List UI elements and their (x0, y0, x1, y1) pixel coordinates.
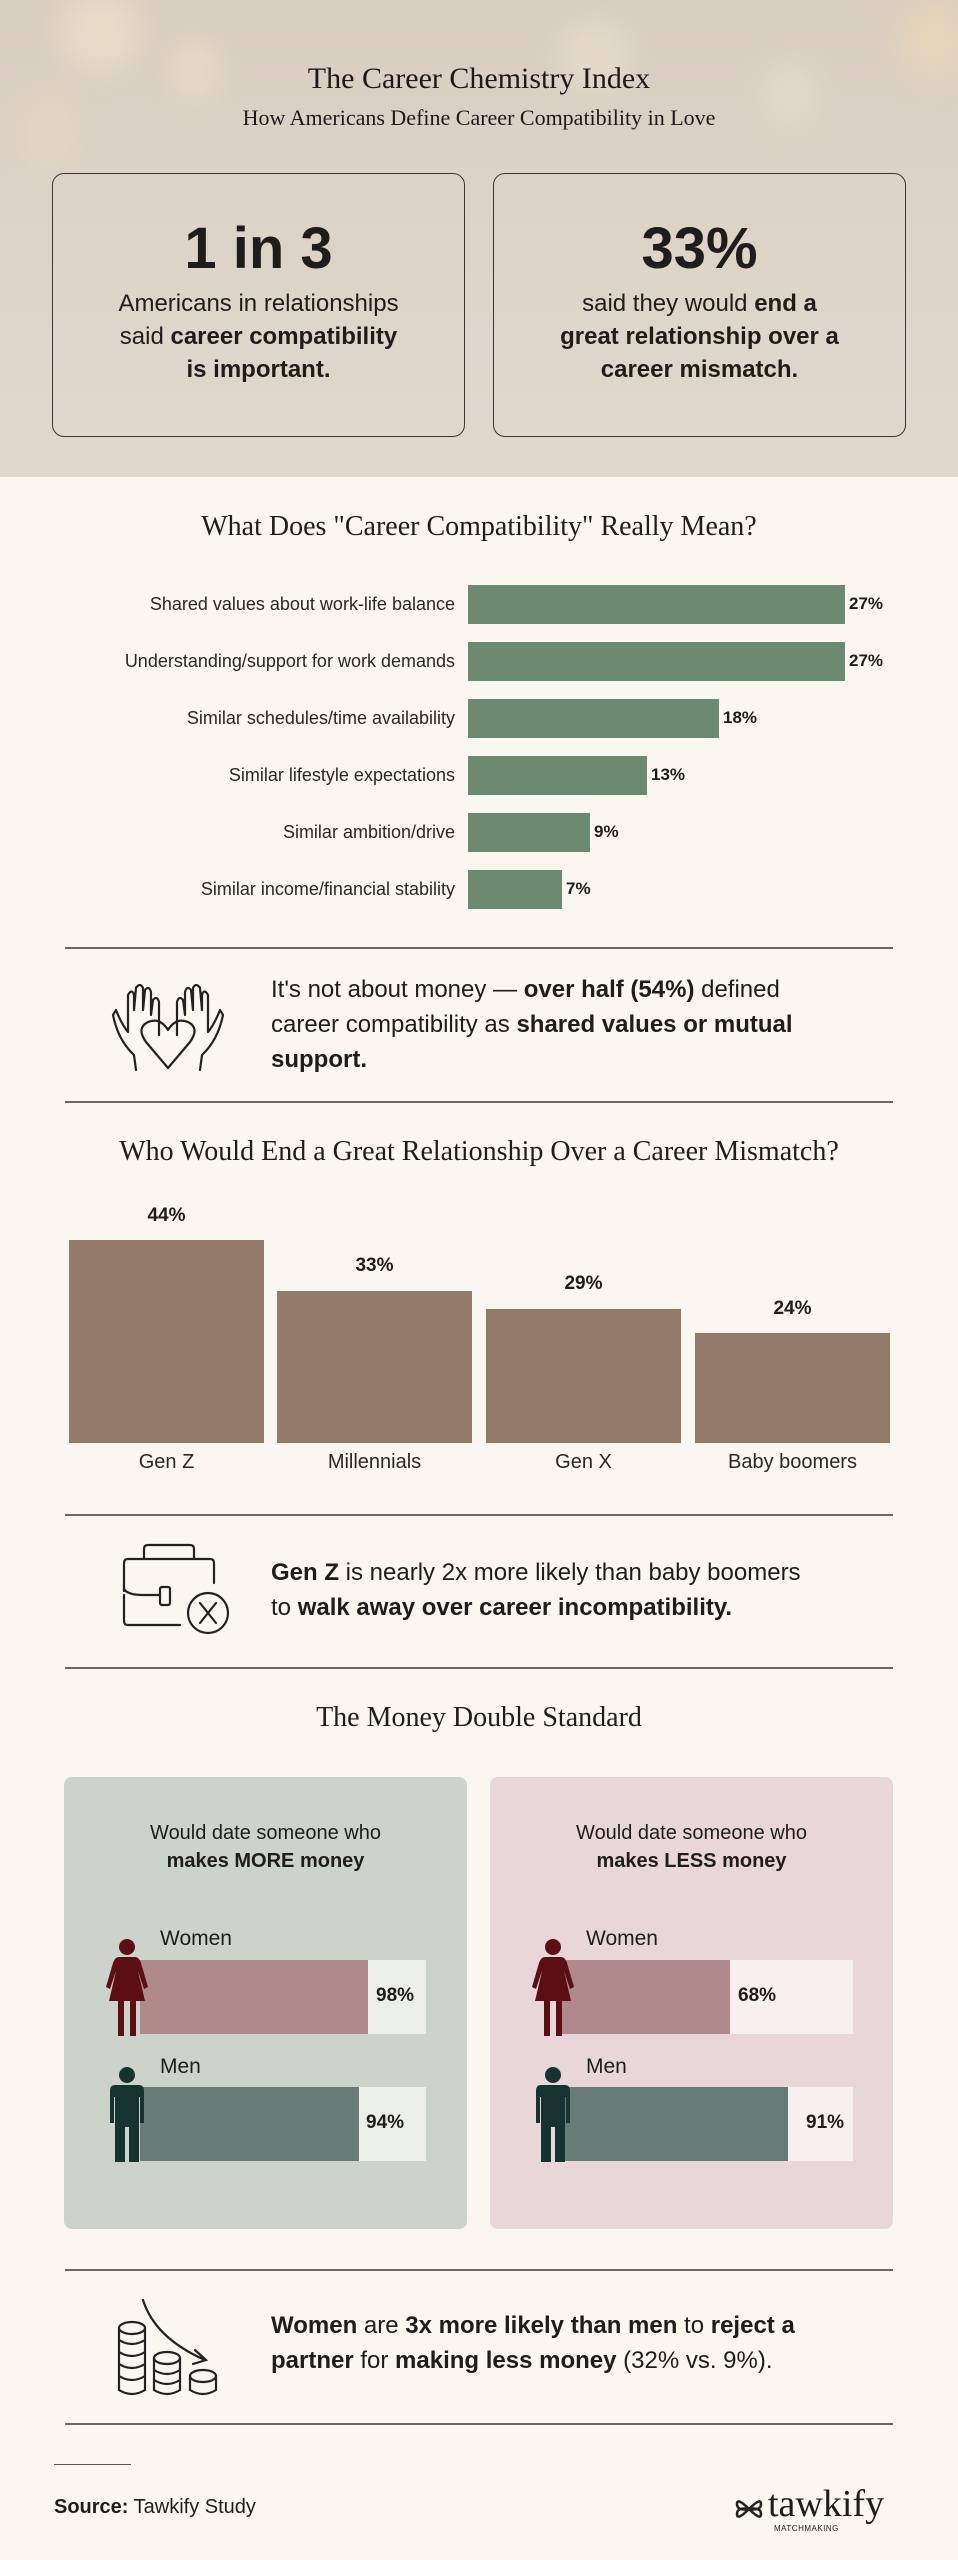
panel heading: Would date someone who (150, 1822, 381, 1844)
header background (0, 0, 958, 477)
vertical bar chart: 29% (564, 1273, 603, 1294)
horizontal bar chart: 9% (594, 822, 619, 841)
men bar 91%: 91% (806, 2112, 844, 2133)
horizontal bar chart: 27% (849, 651, 883, 670)
callout: not about money: support. (271, 1046, 367, 1073)
callout: Gen Z: to walk away over career incompatibility. (271, 1594, 732, 1621)
men bar 94%: 94% (366, 2112, 404, 2133)
stat card: 33%: 33% (641, 216, 758, 281)
horizontal bar chart: 18% (723, 708, 757, 727)
vertical bar chart: 24% (773, 1298, 812, 1319)
vertical bar chart: Baby boomers (728, 1451, 857, 1473)
horizontal bar chart: Similar income/financial stability (201, 879, 455, 899)
panel heading (576, 1822, 807, 1872)
panel: makes less money (490, 1777, 893, 2229)
stat card: 33%: said they would end a (582, 290, 817, 317)
vertical bar chart: Millennials (328, 1451, 421, 1473)
callout: Gen Z (271, 1559, 801, 1621)
horizontal bar chart: 13% (651, 765, 685, 784)
icon: woman (106, 1939, 148, 2036)
icon: briefcase with x (122, 1544, 230, 1634)
panel: makes more money: Men (160, 2055, 201, 2078)
logo: tawkify (736, 2483, 884, 2533)
panel heading: makes MORE money (167, 1850, 364, 1872)
panel: makes less money: Men (586, 2055, 627, 2078)
women bar 98%: 98% (376, 1985, 414, 2006)
vertical bar chart: Gen X (555, 1451, 612, 1473)
icon: woman (532, 1939, 574, 2036)
callout: not about money (271, 976, 793, 1073)
horizontal bar chart: 27% (849, 594, 883, 613)
callout: not about money: career compatibility as shared values or mutual (271, 1011, 793, 1038)
stat card: 1 in 3: Americans in relationships (118, 290, 399, 317)
horizontal bar chart: Shared values about work-life balance (150, 594, 455, 614)
panel: makes more money (64, 1777, 467, 2229)
panel heading: Would date someone who (576, 1822, 807, 1844)
stat card: 1 in 3: 1 in 3 (184, 216, 333, 281)
heading: career compatibility: What Does "Career Compatibility" Really Mean? (201, 511, 757, 542)
callout: women 3x (271, 2312, 795, 2374)
heading: who would end: Who Would End a Great Relationship Over a Career Mismatch? (119, 1136, 839, 1167)
stat card: 33%: great relationship over a (560, 323, 839, 350)
panel: makes less money: Women (586, 1927, 658, 1950)
logo: tawkify: tawkify (768, 2483, 884, 2525)
icon: hands with heart (112, 984, 224, 1072)
vertical bar chart (69, 1205, 890, 1473)
callout: women 3x: partner for making less money (32% vs. 9%). (271, 2347, 773, 2374)
horizontal bar chart: Similar schedules/time availability (187, 708, 455, 728)
icon: coins with down arrow (118, 2298, 218, 2396)
title: The Career Chemistry Index (308, 62, 650, 95)
vertical bar chart: 44% (147, 1205, 186, 1226)
stat card: 33% (493, 173, 906, 437)
callout: not about money: It's not about money — over half (54%) defined (271, 976, 780, 1003)
women bar 68%: 68% (738, 1985, 776, 2006)
icon: man (110, 2067, 144, 2162)
vertical bar chart: Gen Z (139, 1451, 194, 1473)
subtitle: How Americans Define Career Compatibility in Love (243, 105, 715, 130)
stat card: 1 in 3: is important. (186, 356, 330, 383)
heading: money double standard: The Money Double Standard (316, 1702, 642, 1733)
women bar 98% (140, 1960, 426, 2034)
vertical bar chart: 33% (355, 1255, 394, 1276)
panel heading (150, 1822, 381, 1872)
callout: women 3x: Women are 3x more likely than men to reject a (271, 2312, 795, 2339)
men bar 91% (562, 2087, 853, 2161)
women bar 68% (562, 1960, 853, 2034)
horizontal bar chart: 7% (566, 879, 591, 898)
men bar 94% (140, 2087, 426, 2161)
callout: Gen Z: Gen Z is nearly 2x more likely than baby boomers (271, 1559, 801, 1586)
panel: makes more money: Women (160, 1927, 232, 1950)
panel heading: makes LESS money (596, 1850, 787, 1872)
horizontal bar chart: Similar ambition/drive (283, 822, 455, 842)
horizontal bar chart (125, 585, 883, 909)
stat card: 1 in 3: said career compatibility (120, 323, 397, 350)
icon: man (536, 2067, 570, 2162)
logo: tawkify: MATCHMAKING (774, 2524, 839, 2533)
stat card: 1 in 3 (52, 173, 465, 437)
stat card: 33%: career mismatch. (601, 356, 798, 383)
horizontal bar chart: Understanding/support for work demands (125, 651, 455, 671)
source: Source: Tawkify Study (54, 2496, 256, 2518)
horizontal bar chart: Similar lifestyle expectations (229, 765, 455, 785)
